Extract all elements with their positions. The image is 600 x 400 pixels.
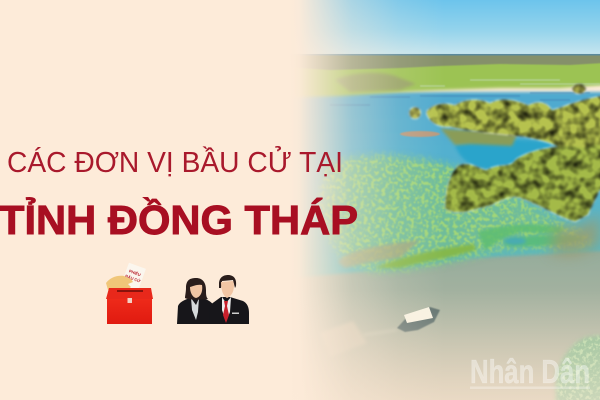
- photo blue streaks: [330, 93, 590, 105]
- box lock: [128, 298, 132, 303]
- box lid: [106, 288, 153, 299]
- ballot paper: PHIẾU: [128, 268, 142, 277]
- woman delegate: [177, 278, 214, 324]
- photo reddish patch: [400, 131, 440, 137]
- photo tree reflection: [440, 128, 520, 146]
- photo bottom fade: [230, 290, 600, 400]
- subtitle text: CÁC ĐƠN VỊ BẦU CỬ TẠI: [7, 145, 343, 179]
- icon: ballot box: [106, 263, 153, 324]
- ballot paper: [120, 263, 146, 294]
- photo lily pads bottom right: [556, 336, 600, 400]
- photo: Dong Thap wetland: [230, 0, 600, 400]
- photo left fade: [230, 0, 600, 400]
- photo green meadow: [270, 58, 600, 98]
- small shrubs: [409, 107, 421, 119]
- upper tree island: [426, 96, 600, 175]
- photo meadow shrubs: [335, 73, 416, 92]
- icon: delegates: [177, 275, 249, 324]
- photo river base: [270, 235, 600, 400]
- ballot paper: BẦU CỬ: [124, 273, 142, 284]
- photo boat front: [397, 307, 440, 332]
- photo sky: [270, 0, 600, 56]
- main title: TỈNH ĐỒNG THÁP: [0, 197, 358, 243]
- man delegate: [209, 275, 249, 324]
- photo meadow water streaks: [420, 80, 600, 86]
- photo brown shallow: [338, 240, 420, 268]
- photo lily pads: [320, 156, 590, 272]
- box body: [107, 299, 152, 324]
- photo horizon and tree line: [270, 54, 600, 70]
- photo blue pool: [455, 139, 552, 170]
- hand: [106, 276, 133, 291]
- photo boat wake: [363, 330, 397, 335]
- photo wetland water: [270, 92, 600, 280]
- photo boat rear: [320, 321, 367, 357]
- photo tree islands: [409, 84, 600, 222]
- lower tree island: [445, 145, 600, 222]
- photo lily green bank: [375, 244, 476, 268]
